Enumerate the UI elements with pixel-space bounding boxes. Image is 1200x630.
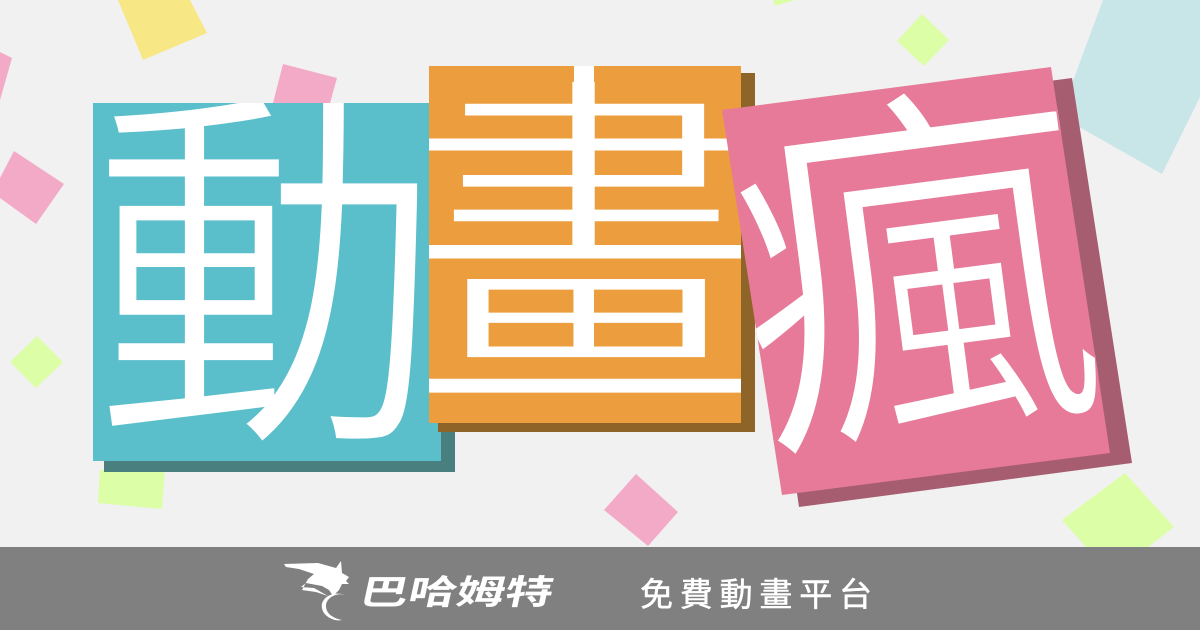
icon: bahamut dragon logo xyxy=(284,561,349,620)
character 動: 動 xyxy=(92,67,441,493)
character 畫: 畫 xyxy=(405,57,765,452)
panel: orange tile 畫 xyxy=(429,66,755,432)
brand name 巴哈姆特: 巴哈姆特 xyxy=(356,573,558,611)
panel: blue tile 動 xyxy=(93,103,455,472)
footer bar xyxy=(0,547,1200,630)
character 瘋: 瘋 xyxy=(711,49,1122,513)
panel: pink tile 瘋 xyxy=(711,49,1132,513)
tagline: 免費動畫平台 xyxy=(640,576,872,613)
